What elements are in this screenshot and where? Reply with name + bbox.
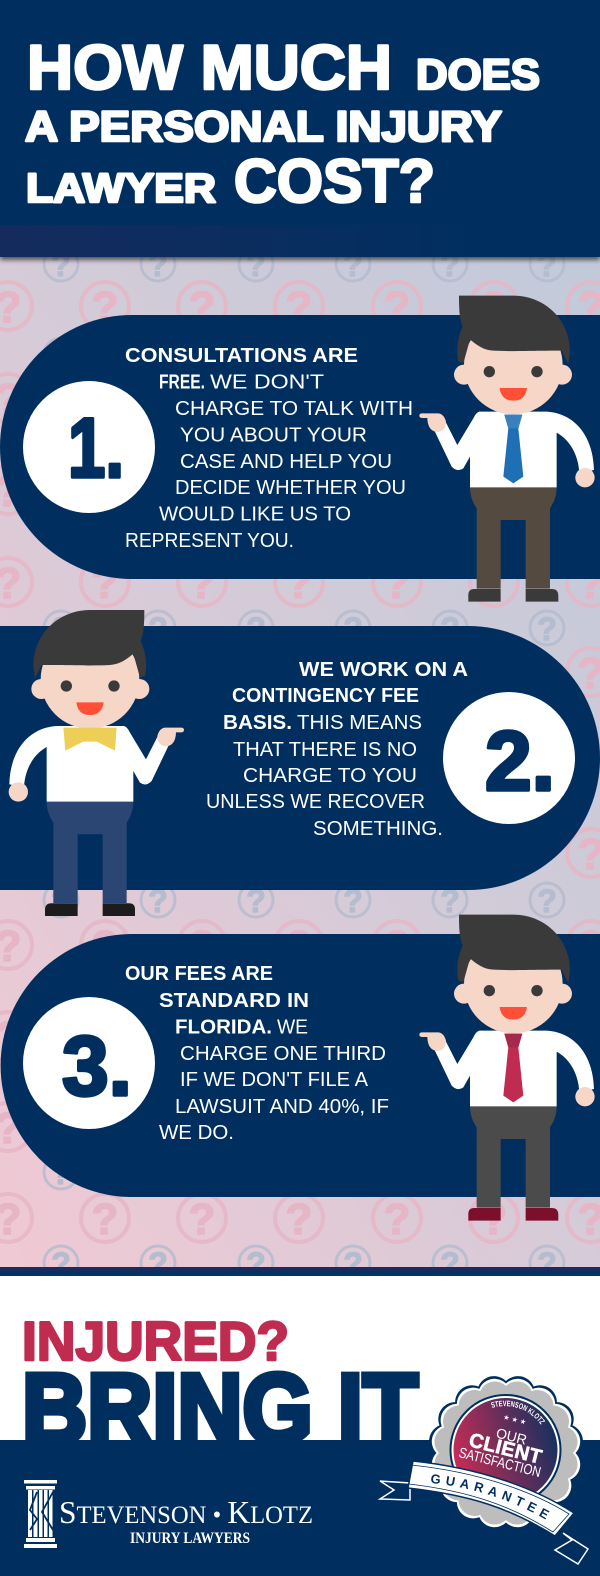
background with question mark pattern: ? — [51, 611, 71, 647]
background with question mark pattern: ? — [246, 883, 266, 919]
panel 2 text: UNLESS WE RECOVER — [206, 790, 425, 813]
panel 2 text: THAT THERE IS NO — [233, 738, 417, 761]
panel 3 text: LAWSUIT AND 40%, IF — [175, 1095, 389, 1118]
background with question mark pattern: ? — [246, 247, 266, 283]
panel 1 text: WE DON'T — [210, 370, 325, 394]
panel 2 text: THIS MEANS — [297, 711, 422, 734]
background with question mark pattern: ? — [343, 1246, 363, 1282]
background with question mark pattern — [0, 247, 600, 1282]
panel 2 text: CONTINGENCY FEE — [232, 684, 419, 707]
background with question mark pattern: ? — [92, 1195, 118, 1244]
background with question mark pattern: ? — [51, 973, 71, 1009]
illustration: lawyer with yellow bow tie — [9, 610, 184, 916]
background with question mark pattern: ? — [537, 611, 557, 647]
illustration: lawyer with red tie — [419, 915, 595, 1221]
background with question mark pattern: ? — [51, 519, 71, 555]
panel 1 text: WOULD LIKE US TO — [159, 502, 351, 526]
number badge 3: 3. — [62, 1019, 132, 1113]
ribbon text: GUARANTEE — [431, 1474, 550, 1520]
title: COST? — [234, 147, 435, 215]
background with question mark pattern: ? — [148, 1246, 168, 1282]
seal top text: STEVENSON KLOTZ — [491, 1400, 546, 1425]
number badge 3 — [23, 997, 155, 1129]
background with question mark pattern: ? — [384, 1195, 410, 1244]
background with question mark pattern: ? — [189, 1195, 215, 1244]
panel 3 text: WE — [277, 1016, 308, 1038]
ribbon — [408, 1461, 574, 1536]
panel 2 text: SOMETHING. — [313, 817, 443, 840]
panel 1 text: FREE. — [159, 370, 205, 394]
seal scalloped edge — [429, 1376, 583, 1530]
panel 3 text: IF WE DON'T FILE A — [180, 1068, 368, 1091]
background with question mark pattern: ? — [440, 1246, 460, 1282]
number badge 1 — [23, 381, 155, 513]
title — [25, 33, 540, 215]
ribbon tails — [380, 1481, 588, 1564]
background with question mark pattern: ? — [189, 922, 215, 971]
panel 3: fees — [1, 934, 600, 1197]
panel 1 text: CASE AND HELP YOU — [180, 450, 392, 473]
badge: client satisfaction guarantee — [378, 1376, 589, 1565]
background with question mark pattern: ? — [51, 1155, 71, 1191]
background with question mark pattern: ? — [51, 883, 71, 919]
panel 1 text: DECIDE WHETHER YOU — [175, 476, 406, 499]
background with question mark pattern: ? — [189, 559, 215, 608]
panel 1 text: CONSULTATIONS ARE — [125, 344, 358, 367]
background with question mark pattern: ? — [92, 922, 118, 971]
background with question mark pattern: ? — [481, 922, 507, 971]
background with question mark pattern: ? — [286, 922, 312, 971]
seal words: CLIENT — [467, 1429, 544, 1469]
background with question mark pattern: ? — [537, 883, 557, 919]
seal words: OUR — [495, 1425, 529, 1448]
background with question mark pattern: ? — [286, 1195, 312, 1244]
background with question mark pattern: ? — [51, 338, 71, 374]
number badge 1: 1. — [68, 401, 124, 495]
background with question mark pattern: ? — [343, 883, 363, 919]
seal center — [450, 1395, 560, 1505]
footer section — [0, 1267, 600, 1576]
background with question mark pattern: ? — [343, 611, 363, 647]
seal words — [457, 1417, 549, 1481]
title: LAWYER — [26, 165, 216, 211]
title: HOW MUCH — [27, 33, 392, 103]
background with question mark pattern: ? — [148, 247, 168, 283]
background with question mark pattern: ? — [343, 247, 363, 283]
illustration: lawyer with blue tie — [419, 296, 595, 602]
firm name: STEVENSON • KLOTZ — [59, 1494, 313, 1530]
background with question mark pattern: ? — [51, 247, 71, 283]
seal words: SATISFACTION — [457, 1445, 542, 1481]
logo: Stevenson Klotz — [24, 1480, 313, 1548]
background with question mark pattern: ? — [148, 611, 168, 647]
panel 2 text: WE WORK ON A — [299, 658, 468, 681]
panel 1 text: REPRESENT YOU. — [125, 529, 294, 552]
background with question mark pattern: ? — [481, 1195, 507, 1244]
headline: bring it: BRING IT — [22, 1353, 418, 1464]
headline: injured: INJURED? — [22, 1310, 289, 1372]
panel 3 text: OUR FEES ARE — [125, 962, 273, 985]
background with question mark pattern: ? — [51, 1246, 71, 1282]
panel 1: consultations — [0, 315, 600, 579]
panel 1 text: YOU ABOUT YOUR — [180, 424, 367, 446]
background with question mark pattern: ? — [246, 611, 266, 647]
header banner — [0, 0, 600, 257]
panel 3 text: WE DO. — [159, 1121, 234, 1144]
background with question mark pattern: ? — [440, 611, 460, 647]
background with question mark pattern: ? — [92, 283, 118, 332]
background with question mark pattern: ? — [440, 883, 460, 919]
background with question mark pattern: ? — [384, 559, 410, 608]
panel 3 text — [125, 962, 389, 1144]
panel 3 text: FLORIDA. — [175, 1016, 272, 1038]
panel 3 text: STANDARD IN — [159, 989, 309, 1012]
background with question mark pattern: ? — [440, 247, 460, 283]
panel 1 text: CHARGE TO TALK WITH — [175, 397, 413, 420]
panel 2 text: BASIS. — [223, 711, 292, 734]
background with question mark pattern: ? — [286, 283, 312, 332]
seal stars: ★ ★ ★ — [502, 1413, 527, 1427]
background with question mark pattern: ? — [384, 283, 410, 332]
background with question mark pattern: ? — [148, 883, 168, 919]
panel 2: contingency fee — [0, 626, 600, 890]
number badge 2: 2. — [485, 714, 555, 808]
firm tagline: INJURY LAWYERS — [130, 1530, 250, 1547]
panel 2 text: CHARGE TO YOU — [243, 764, 417, 787]
panel 1 text — [125, 344, 413, 552]
background with question mark pattern: ? — [384, 922, 410, 971]
panel 3 text: CHARGE ONE THIRD — [180, 1042, 386, 1065]
title: DOES — [416, 51, 540, 99]
background with question mark pattern: ? — [481, 283, 507, 332]
panel 2 text — [206, 658, 468, 840]
background with question mark pattern: ? — [286, 559, 312, 608]
background with question mark pattern: ? — [537, 247, 557, 283]
background with question mark pattern: ? — [481, 559, 507, 608]
title: A PERSONAL INJURY — [25, 103, 502, 151]
background with question mark pattern: ? — [537, 1246, 557, 1282]
background with question mark pattern: ? — [92, 559, 118, 608]
icon: column — [24, 1480, 57, 1548]
background with question mark pattern: ? — [189, 283, 215, 332]
background with question mark pattern: ? — [246, 1246, 266, 1282]
number badge 2 — [443, 692, 575, 824]
